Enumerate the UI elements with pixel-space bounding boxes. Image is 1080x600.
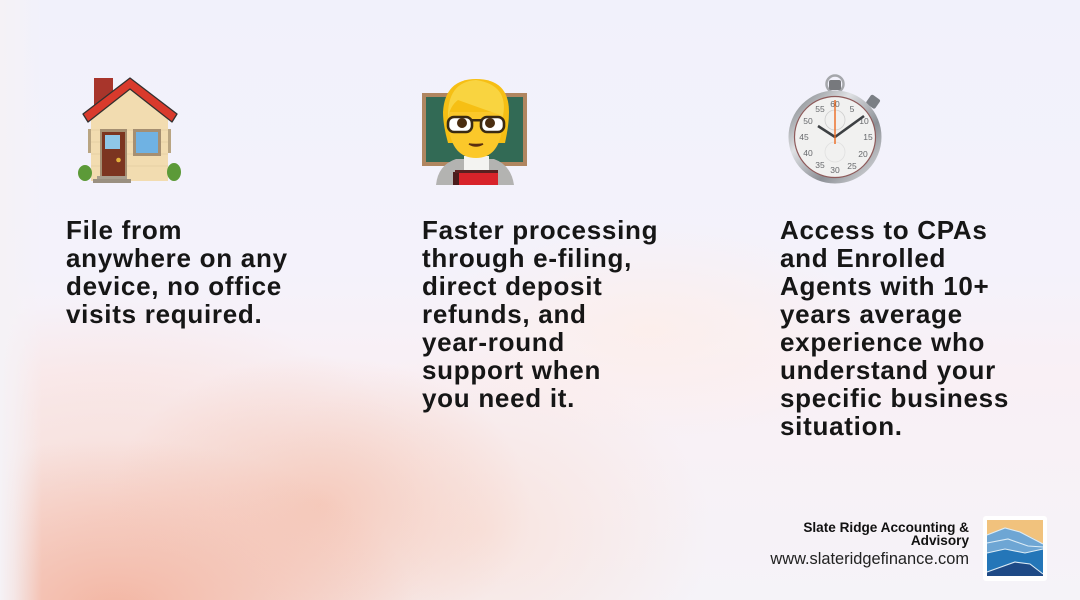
icon: stopwatch: 50 <box>803 116 813 126</box>
text: benefit 2: year-round <box>422 327 565 357</box>
text: benefit 3: and Enrolled <box>780 243 946 273</box>
text: benefit 2: support when <box>422 355 601 385</box>
text: benefit 2: Faster processing <box>422 215 658 245</box>
company name <box>803 520 969 548</box>
icon: stopwatch: 45 <box>799 132 809 142</box>
icon: stopwatch: 25 <box>847 161 857 171</box>
text: benefit 1: anywhere on any <box>66 243 288 273</box>
text: benefit 3: Agents with 10+ <box>780 271 989 301</box>
text: benefit 2 <box>422 215 658 413</box>
text: benefit 3: specific business <box>780 383 1009 413</box>
text: benefit 3 <box>780 215 1009 441</box>
icon: stopwatch: 35 <box>815 160 825 170</box>
text: benefit 2: you need it. <box>422 383 575 413</box>
text: benefit 1: device, no office <box>66 271 282 301</box>
icon: stopwatch <box>788 74 882 184</box>
company name: Advisory <box>911 533 969 548</box>
text: benefit 3: situation. <box>780 411 903 441</box>
icon: stopwatch: 60 <box>830 99 840 109</box>
text: benefit 2: direct deposit <box>422 271 603 301</box>
text: benefit 3: Access to CPAs <box>780 215 988 245</box>
text: benefit 2: refunds, and <box>422 299 587 329</box>
icon: stopwatch: 40 <box>803 148 813 158</box>
icon: teacher <box>422 79 527 185</box>
logo <box>983 516 1047 581</box>
icon: house <box>78 77 181 183</box>
text: benefit 1 <box>66 215 288 329</box>
icon: stopwatch: 5 <box>850 104 855 114</box>
icon: stopwatch: 10 <box>859 116 869 126</box>
icon: stopwatch: 20 <box>858 149 868 159</box>
text: benefit 2: through e-filing, <box>422 243 632 273</box>
text: benefit 1: File from <box>66 215 182 245</box>
website: www.slateridgefinance.com <box>770 550 969 568</box>
icon: stopwatch: 55 <box>815 104 825 114</box>
text: benefit 3: understand your <box>780 355 996 385</box>
text: benefit 3: years average <box>780 299 963 329</box>
company name: Slate Ridge Accounting & <box>803 520 969 535</box>
text: benefit 1: visits required. <box>66 299 262 329</box>
icon: stopwatch: 15 <box>863 132 873 142</box>
text: benefit 3: experience who <box>780 327 985 357</box>
icon: stopwatch: 30 <box>830 165 840 175</box>
